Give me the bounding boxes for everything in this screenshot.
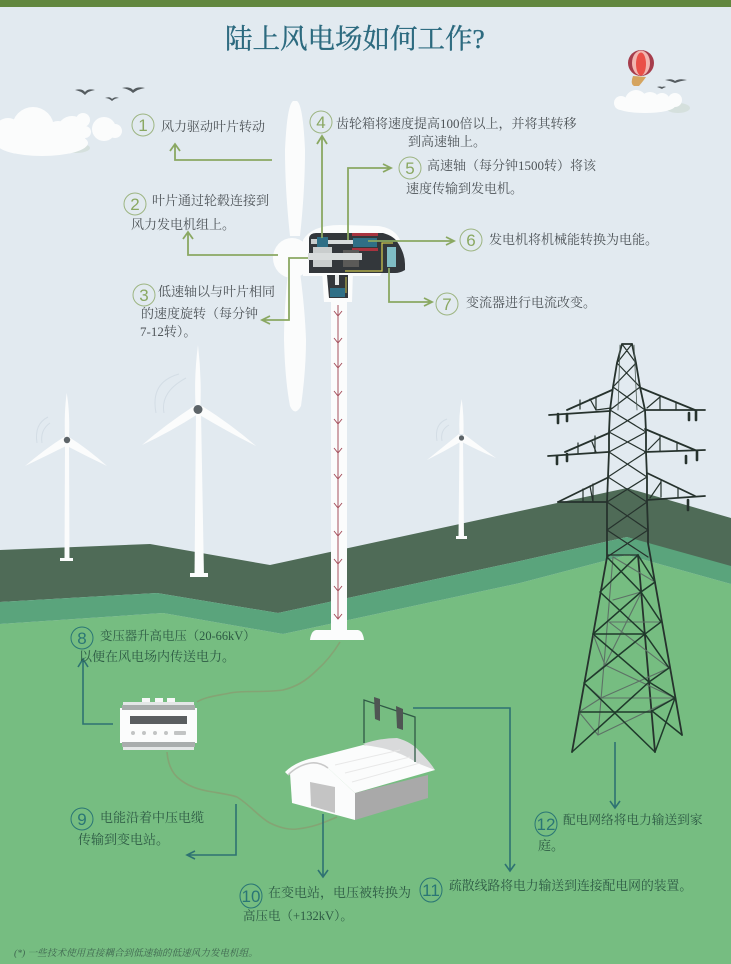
step 1: 风力驱动叶片转动 (161, 119, 265, 134)
hot air balloon (628, 50, 654, 86)
step 2: 叶片通过轮毂连接到 (152, 193, 269, 208)
step 4: 4 (316, 113, 326, 132)
arrow 11 (413, 708, 515, 871)
step 2: 2 (130, 195, 140, 214)
step 7: 变流器进行电流改变。 (466, 295, 596, 310)
step 7 (436, 293, 596, 315)
cloud right (614, 90, 690, 113)
step 10 (240, 884, 411, 923)
wind arcs (36, 374, 449, 443)
arrow 3 (262, 258, 308, 324)
step 12: 配电网络将电力输送到家 (563, 812, 703, 827)
yaw drive (327, 275, 348, 298)
step 11: 11 (422, 881, 440, 900)
step 9 (71, 808, 204, 847)
arrow 2 (183, 232, 278, 255)
arrow 6 (368, 237, 454, 245)
step 2: 风力发电机组上。 (131, 217, 235, 232)
step 8: 变压器升高电压（20-66kV） (100, 628, 256, 643)
step 4: 到高速轴上。 (408, 134, 486, 149)
arrow 12 (610, 742, 620, 808)
step 12 (535, 812, 703, 853)
step 12: 12 (537, 815, 555, 834)
step 10: 高压电（+132kV）。 (243, 908, 353, 923)
birds right (657, 79, 687, 89)
step 4 (310, 111, 577, 149)
step 9: 传输到变电站。 (78, 832, 169, 847)
arrow 10 (318, 814, 328, 877)
step 3: 的速度旋转（每分钟 (141, 306, 258, 321)
top bar (0, 0, 731, 7)
main turbine tower (310, 296, 364, 640)
step 5 (399, 157, 597, 196)
small turbine left (25, 393, 107, 561)
nacelle cutaway (308, 233, 405, 273)
step 6: 发电机将机械能转换为电能。 (489, 232, 658, 247)
step 5: 高速轴（每分钟1500转）将该 (427, 158, 597, 173)
substation building (285, 738, 435, 820)
mid band (0, 537, 731, 634)
step 3: 低速轴以与叶片相同 (158, 284, 275, 299)
arrow 7 (389, 268, 432, 306)
step 1: 1 (138, 116, 148, 135)
step 2 (124, 193, 269, 232)
transformer box (120, 698, 197, 750)
step 3: 3 (139, 286, 149, 305)
cable transformer to substation (167, 752, 337, 829)
step 3 (133, 284, 275, 339)
step 11: 疏散线路将电力输送到连接配电网的装置。 (449, 878, 692, 893)
transmission tower (548, 344, 705, 752)
main turbine blades and hub (273, 101, 400, 412)
title: 陆上风电场如何工作? (225, 23, 485, 54)
step 9: 9 (77, 810, 87, 829)
arrow 4 (317, 136, 327, 238)
cloud left (0, 107, 122, 156)
small turbine right (427, 399, 496, 539)
green ground (0, 555, 731, 964)
arrow 1 (170, 144, 272, 160)
arrow 9 (187, 804, 236, 859)
step 8 (71, 627, 256, 664)
step 6 (460, 229, 658, 251)
birds left (75, 87, 145, 101)
step 5: 速度传输到发电机。 (406, 181, 523, 196)
arrow 8 (78, 659, 113, 724)
step 3: 7-12转）。 (140, 324, 196, 339)
cable turbine to transformer (197, 642, 340, 702)
step 7: 7 (442, 295, 452, 314)
step 10: 10 (242, 887, 260, 906)
step 12: 庭。 (538, 838, 564, 853)
step 5: 5 (405, 159, 415, 178)
step 8: 以便在风电场内传送电力。 (79, 649, 235, 664)
step 9: 电能沿着中压电缆 (100, 810, 204, 825)
medium turbine centre (142, 345, 256, 577)
dark hill (0, 488, 731, 613)
step 4: 齿轮箱将速度提高100倍以上，并将其转移 (336, 116, 577, 132)
step 11 (420, 878, 692, 902)
step 6: 6 (466, 231, 476, 250)
arrow 5 (348, 164, 391, 240)
footnote: (*) 一些技术使用直接耦合到低速轴的低速风力发电机组。 (14, 947, 258, 959)
step 1 (132, 114, 265, 136)
substation pylon (364, 697, 415, 762)
step 8: 8 (77, 629, 87, 648)
step 10: 在变电站，电压被转换为 (268, 885, 411, 901)
